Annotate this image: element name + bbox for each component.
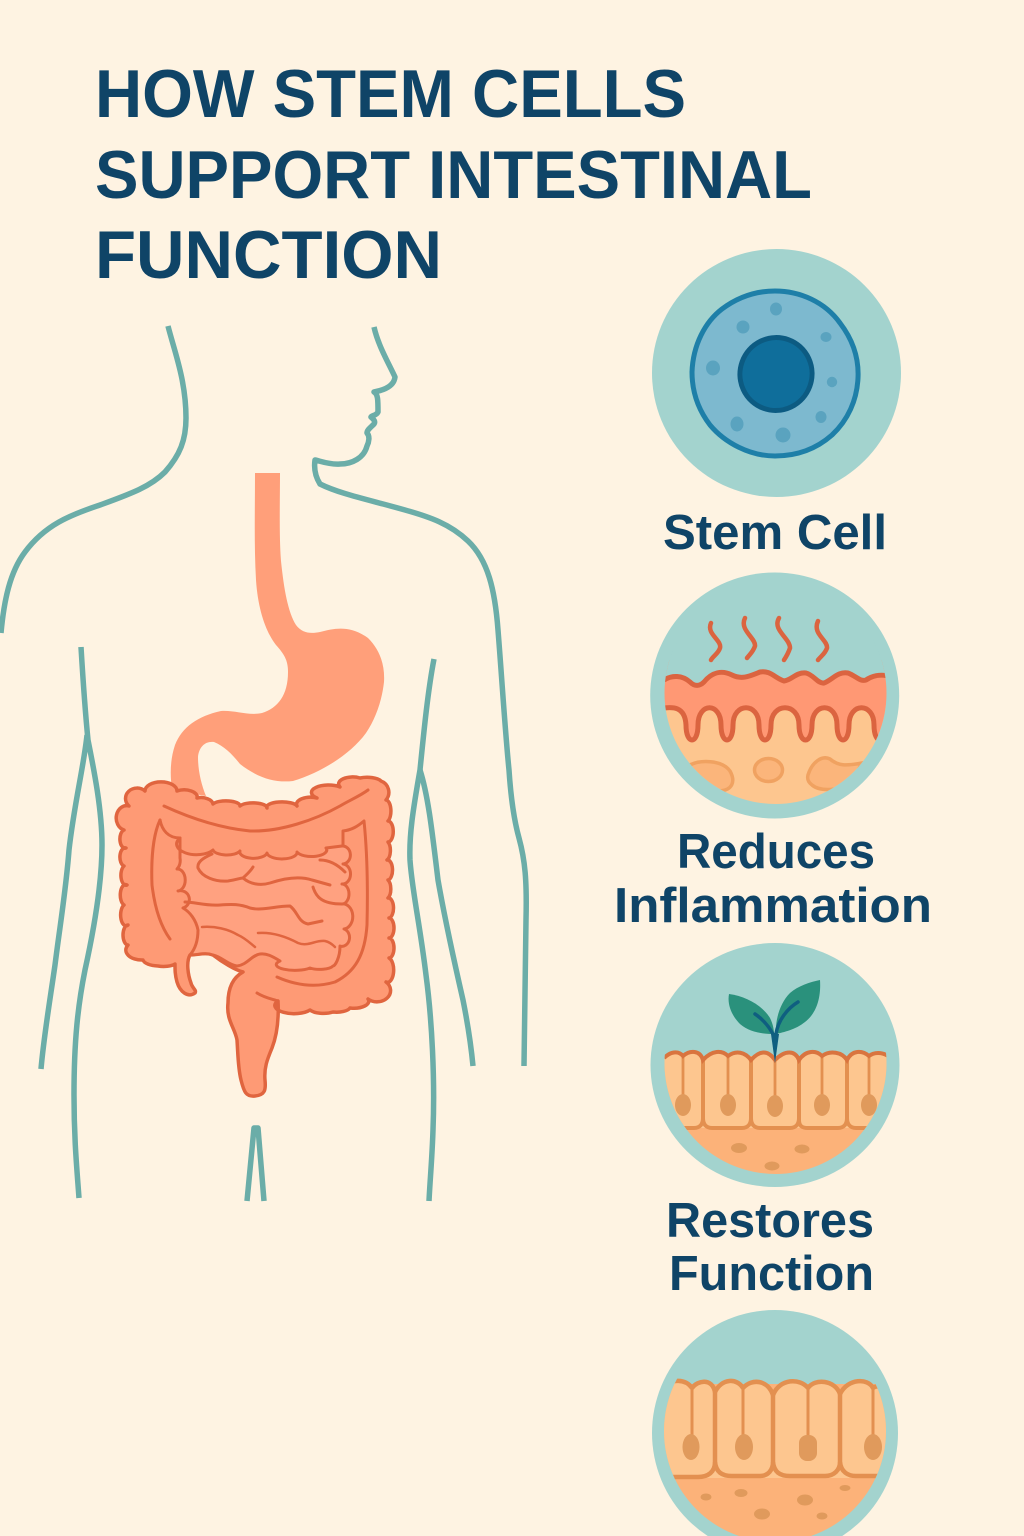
title: FUNCTION — [95, 217, 442, 293]
icon: reduces inflammation — [650, 572, 900, 818]
icon: restores function — [650, 943, 900, 1187]
icon: stem cell — [652, 249, 901, 497]
body outline — [1, 326, 526, 1201]
label: restores function — [666, 1194, 874, 1301]
small intestine area — [177, 838, 353, 970]
stomach and esophagus — [171, 473, 384, 796]
title: HOW STEM CELLS — [95, 56, 686, 132]
title — [95, 56, 812, 293]
intestines — [116, 777, 394, 1096]
label: restores function: Function — [669, 1247, 874, 1301]
large intestine outer — [116, 777, 394, 1096]
icon: sprout — [729, 980, 820, 1063]
label: reduces inflammation: Reduces — [677, 825, 875, 879]
label: reduces inflammation — [614, 825, 932, 933]
label: reduces inflammation: Inflammation — [614, 879, 932, 933]
label: stem cell: Stem Cell — [663, 506, 887, 560]
label: restores function: Restores — [666, 1194, 874, 1248]
intestine fold lines — [152, 790, 368, 1001]
icon: healthy intestinal lining — [652, 1310, 898, 1536]
title: SUPPORT INTESTINAL — [95, 137, 812, 213]
